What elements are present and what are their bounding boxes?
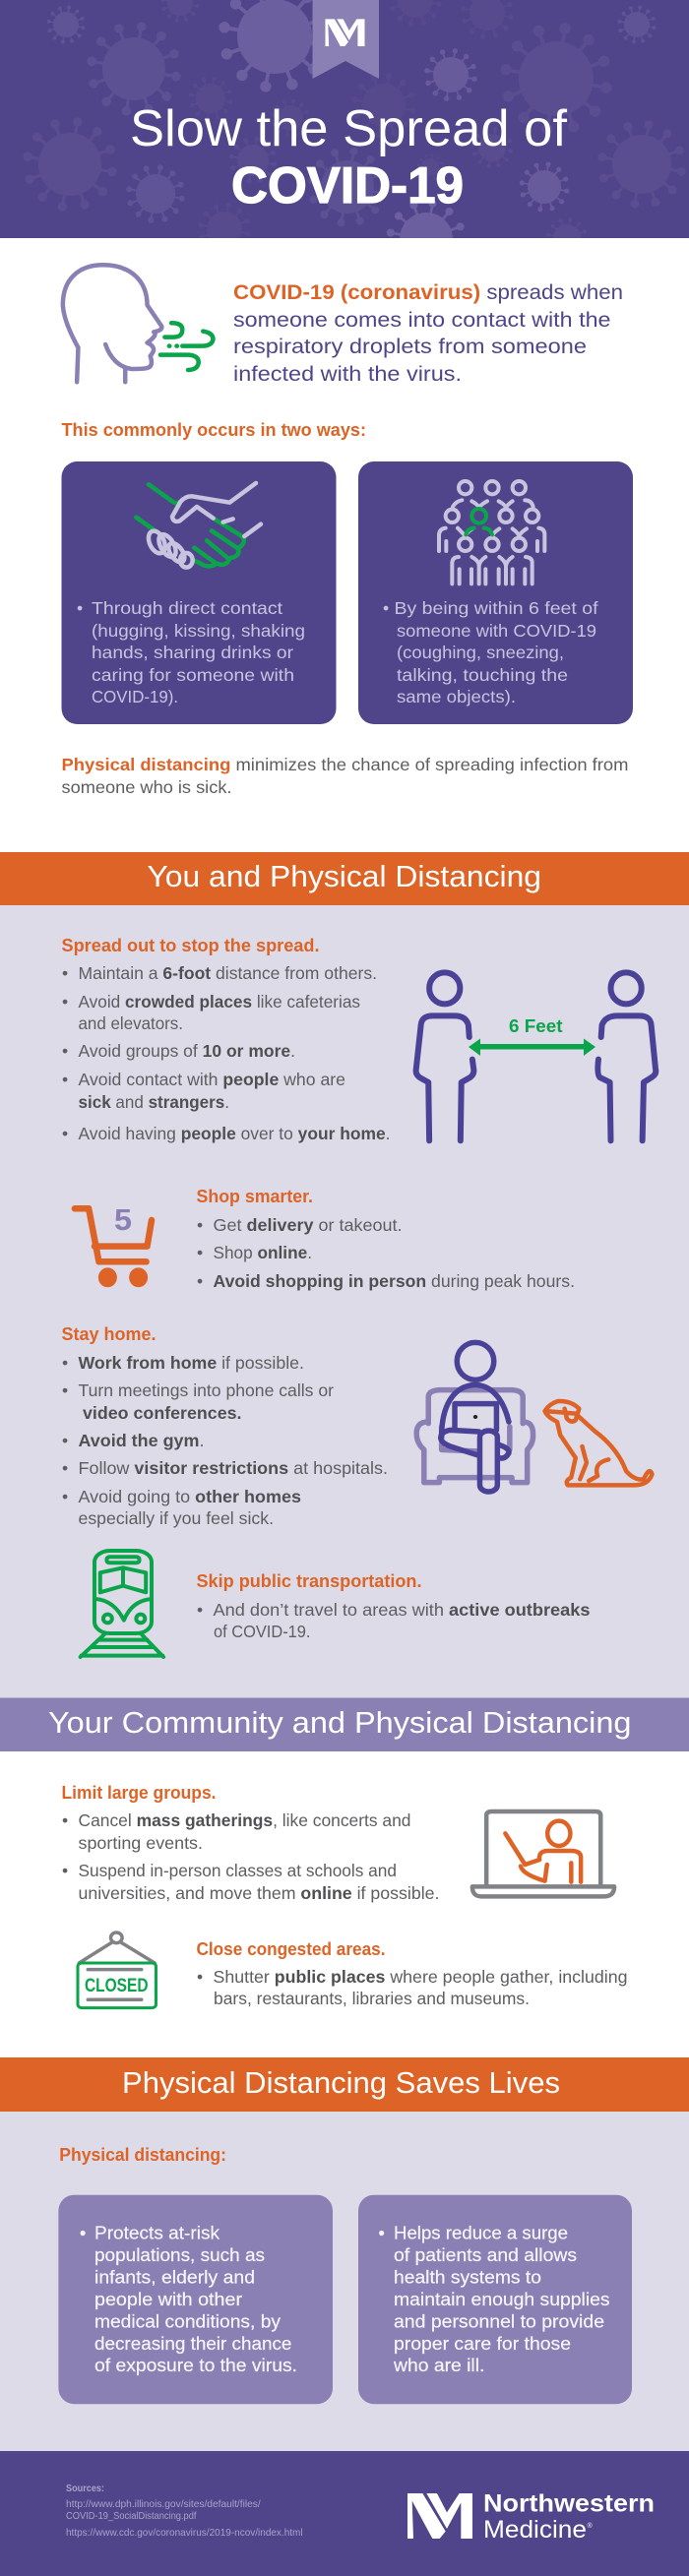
- sources: [66, 2483, 303, 2539]
- icon: closed sign: [78, 1932, 156, 2008]
- sources: http://www.dph.illinois.gov/sites/default/files/: [66, 2498, 261, 2510]
- panel: reduce surge: and personnel to provide: [394, 2312, 604, 2332]
- text: within 6 feet: •: [383, 598, 389, 618]
- sources: COVID-19_SocialDistancing.pdf: [66, 2510, 197, 2522]
- block: close congested areas: bars, restaurants, libraries and museums.: [214, 1989, 530, 2008]
- block: limit large groups: Cancel mass gatherings, like concerts and: [79, 1810, 410, 1830]
- block: stay home: video conferences.: [83, 1403, 242, 1423]
- band: You and Physical Distancing: You and Physical Distancing: [148, 859, 541, 893]
- panel: protects at-risk: of exposure to the virus.: [94, 2356, 297, 2375]
- header banner: [0, 0, 689, 278]
- block: spread out: and elevators.: [79, 1013, 183, 1033]
- panel: reduce surge: •: [378, 2224, 385, 2243]
- block: spread out: Spread out to stop the spread.: [61, 936, 319, 955]
- intro text: [233, 280, 623, 386]
- text: physical distancing summary: Physical distancing minimizes the chance of spreading infection from: [61, 755, 628, 774]
- block: skip public transportation: [197, 1571, 591, 1641]
- block: spread out: Avoid having people over to your home.: [79, 1124, 390, 1143]
- text: within 6 feet: (coughing, sneezing,: [397, 643, 564, 662]
- block: stay home: Follow visitor restrictions at hospitals.: [79, 1458, 388, 1478]
- text: direct contact: •: [77, 598, 83, 618]
- block: spread out: Maintain a 6-foot distance from others.: [79, 963, 377, 983]
- block: stay home: •: [62, 1353, 68, 1373]
- block: close congested areas: Close congested areas.: [197, 1939, 386, 1959]
- block: stay home: •: [62, 1431, 68, 1450]
- block: shop smarter: •: [197, 1271, 203, 1291]
- block: stay home: •: [62, 1487, 68, 1506]
- text: within 6 feet: [383, 598, 598, 706]
- ribbon logo: [313, 0, 379, 79]
- title: [130, 100, 568, 215]
- heading: two ways: This commonly occurs in two ways:: [61, 420, 366, 440]
- block: limit large groups: •: [62, 1810, 68, 1830]
- icon: online class laptop: [472, 1811, 614, 1896]
- band: You and Physical Distancing: [0, 852, 689, 905]
- block: stay home: Avoid the gym.: [79, 1431, 205, 1450]
- panel: reduce surge: Helps reduce a surge: [394, 2224, 568, 2243]
- block: stay home: Avoid going to other homes: [79, 1487, 301, 1506]
- block: stay home: •: [62, 1458, 68, 1478]
- footer: [0, 2451, 689, 2576]
- panel: protects at-risk: decreasing their chance: [94, 2334, 291, 2354]
- section: lavender background bottom: [0, 2112, 689, 2451]
- icon: person working in armchair with dog: [416, 1342, 652, 1492]
- block: spread out: sick and strangers.: [79, 1092, 229, 1112]
- text: within 6 feet: same objects).: [397, 687, 516, 706]
- intro text: respiratory droplets from someone: [233, 335, 587, 358]
- title: Slow the Spread of: [130, 100, 568, 157]
- block: close congested areas: •: [197, 1967, 203, 1987]
- block: skip public transportation: And don’t travel to areas with active outbreaks: [213, 1600, 591, 1620]
- Northwestern Medicine logo: ®: [587, 2522, 593, 2530]
- panel: protects at-risk: •: [80, 2224, 86, 2243]
- block: shop smarter: Avoid shopping in person during peak hours.: [213, 1271, 575, 1291]
- block: skip public transportation: Skip public transportation.: [197, 1571, 421, 1591]
- panel: reduce surge: proper care for those: [394, 2334, 571, 2354]
- panel: protects at-risk: infants, elderly and: [94, 2268, 255, 2288]
- virus background pattern: [23, 0, 686, 278]
- block: spread out: Avoid contact with people who are: [79, 1070, 345, 1089]
- band: Physical Distancing Saves Lives: Physical Distancing Saves Lives: [122, 2065, 560, 2100]
- panel: protects at-risk: [58, 2195, 333, 2404]
- block: shop smarter: [197, 1187, 575, 1291]
- block: spread out: •: [62, 1041, 68, 1061]
- sources: Sources:: [66, 2483, 104, 2494]
- block: shop smarter: Shop smarter.: [197, 1187, 313, 1206]
- label: 6 feet: 6 Feet: [509, 1016, 563, 1036]
- icon: shopping cart: 5: [114, 1202, 132, 1237]
- block: shop smarter: Get delivery or takeout.: [213, 1215, 402, 1235]
- text: direct contact: caring for someone with: [92, 665, 294, 685]
- title: COVID-19: [231, 157, 464, 215]
- text: within 6 feet: By being within 6 feet of: [394, 598, 598, 618]
- block: close congested areas: [197, 1939, 628, 2008]
- block: shop smarter: •: [197, 1243, 203, 1262]
- icon: crowd: [439, 481, 544, 583]
- dog: [545, 1401, 652, 1485]
- panel: protects at-risk: people with other: [94, 2290, 242, 2309]
- text: within 6 feet: talking, touching the: [397, 665, 568, 685]
- block: limit large groups: •: [62, 1861, 68, 1880]
- section: white community background: [0, 1751, 689, 2057]
- text: direct contact: COVID-19).: [92, 687, 178, 706]
- panel: reduce surge: maintain enough supplies: [394, 2290, 610, 2309]
- section: lavender background: [0, 905, 689, 1698]
- Northwestern Medicine logo: Northwestern: [483, 2490, 655, 2518]
- Northwestern Medicine logo: [407, 2490, 655, 2544]
- panel: reduce surge: [358, 2195, 632, 2404]
- sources: https://www.cdc.gov/coronavirus/2019-ncov/index.html: [66, 2527, 303, 2539]
- text: direct contact: (hugging, kissing, shaking: [92, 621, 305, 641]
- text: physical distancing summary: someone who is sick.: [61, 777, 232, 797]
- text: physical distancing summary: [61, 755, 628, 797]
- block: spread out: [61, 936, 390, 1143]
- arrow: 6 feet: [469, 1039, 595, 1056]
- text: within 6 feet: someone with COVID-19: [397, 621, 596, 641]
- heading: physical distancing: Physical distancing:: [59, 2145, 226, 2165]
- block: shop smarter: •: [197, 1215, 203, 1235]
- block: stay home: especially if you feel sick.: [79, 1508, 274, 1528]
- block: limit large groups: sporting events.: [79, 1833, 203, 1853]
- block: close congested areas: Shutter public places where people gather, including: [213, 1967, 628, 1987]
- block: shop smarter: Shop online.: [213, 1243, 312, 1262]
- block: spread out: •: [62, 1124, 68, 1143]
- block: spread out: •: [62, 963, 68, 983]
- block: stay home: [61, 1324, 388, 1528]
- block: stay home: Stay home.: [61, 1324, 156, 1344]
- band: Your Community and Physical Distancing: [0, 1698, 689, 1751]
- block: limit large groups: [61, 1783, 440, 1903]
- block: limit large groups: Suspend in-person classes at schools and: [79, 1861, 397, 1880]
- block: spread out: •: [62, 992, 68, 1012]
- block: spread out: •: [62, 1070, 68, 1089]
- block: stay home: Work from home if possible.: [79, 1353, 304, 1373]
- icon: train: [81, 1551, 163, 1657]
- icon: person coughing: [63, 265, 214, 382]
- icon: shopping cart: [75, 1202, 152, 1284]
- block: stay home: •: [62, 1380, 68, 1400]
- block: stay home: Turn meetings into phone calls or: [79, 1380, 334, 1400]
- panel: protects at-risk: populations, such as: [94, 2245, 265, 2265]
- block: skip public transportation: •: [197, 1600, 203, 1620]
- icon: handshake: [136, 483, 261, 568]
- icon: two people 6 feet apart: [416, 972, 656, 1140]
- person with laptop: [441, 1342, 509, 1492]
- panel: direct contact: [61, 461, 337, 724]
- band: Physical Distancing Saves Lives: [0, 2057, 689, 2112]
- intro text: COVID-19 (coronavirus) spreads when: [233, 280, 623, 304]
- panel: protects at-risk: Protects at-risk: [94, 2224, 220, 2243]
- text: direct contact: Through direct contact: [92, 598, 282, 618]
- text: direct contact: [77, 598, 305, 706]
- section: white intro background: [0, 238, 689, 852]
- band: Your Community and Physical Distancing: Your Community and Physical Distancing: [48, 1705, 632, 1740]
- intro text: someone comes into contact with the: [233, 308, 610, 332]
- panel: reduce surge: who are ill.: [393, 2356, 484, 2375]
- block: limit large groups: universities, and move them online if possible.: [79, 1883, 440, 1903]
- panel: reduce surge: health systems to: [394, 2268, 541, 2288]
- block: spread out: Avoid groups of 10 or more.: [79, 1041, 295, 1061]
- intro text: infected with the virus.: [233, 362, 462, 386]
- text: direct contact: hands, sharing drinks or: [92, 643, 293, 662]
- block: skip public transportation: of COVID-19.: [214, 1622, 311, 1641]
- panel: within 6 feet: [358, 461, 633, 724]
- panel: protects at-risk: medical conditions, by: [94, 2312, 281, 2332]
- icon: closed sign: CLOSED: [85, 1975, 148, 1996]
- armchair: [416, 1390, 533, 1483]
- block: spread out: Avoid crowded places like cafeterias: [79, 992, 360, 1012]
- panel: reduce surge: of patients and allows: [394, 2245, 577, 2265]
- Northwestern Medicine logo: Medicine: [483, 2516, 587, 2544]
- block: limit large groups: Limit large groups.: [61, 1783, 217, 1803]
